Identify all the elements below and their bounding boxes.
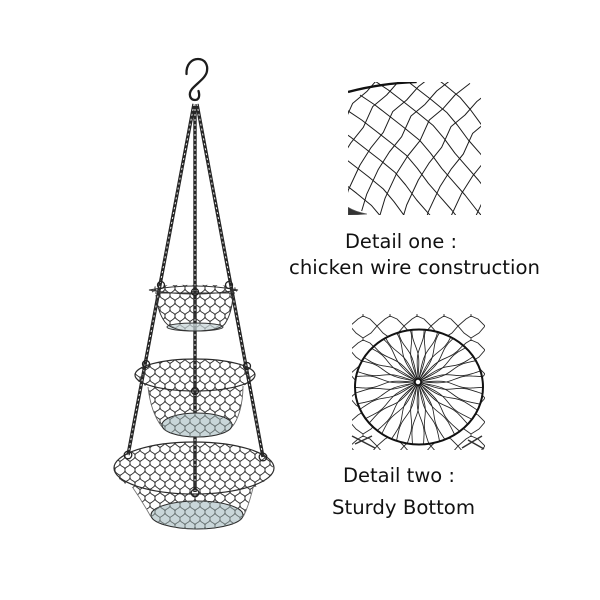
center hub — [415, 379, 421, 385]
bottom disc background — [355, 330, 483, 444]
small basket outline — [149, 286, 238, 331]
small basket base — [167, 323, 223, 331]
outer net — [352, 314, 485, 450]
chain rings — [124, 282, 267, 497]
hanging basket product illustration — [114, 59, 274, 529]
detail two caption — [332, 464, 475, 519]
bottom ring — [355, 330, 483, 444]
wire rim — [348, 82, 417, 92]
caption line 1: Detail one : — [345, 230, 457, 253]
detail one photo: chicken wire close-up — [348, 82, 481, 215]
large basket mesh — [114, 442, 273, 528]
detail two photo: sturdy bottom close-up — [352, 314, 485, 450]
middle basket base — [162, 413, 232, 437]
large basket outline — [114, 442, 274, 494]
small basket mesh — [150, 285, 238, 331]
large basket base — [151, 501, 243, 529]
chains — [128, 104, 263, 492]
icon: S hook — [186, 59, 207, 100]
caption line 2: chicken wire construction — [289, 256, 540, 279]
bottom corner debris — [352, 436, 484, 449]
caption line 2: Sturdy Bottom — [332, 496, 475, 519]
middle basket outline — [135, 359, 255, 391]
middle basket — [135, 359, 255, 437]
detail one caption — [289, 230, 540, 279]
caption line 1: Detail two : — [343, 464, 455, 487]
infographic canvas — [113, 58, 538, 530]
rim shadow at corner — [348, 207, 367, 215]
spiral petal net — [356, 330, 482, 444]
small top basket — [149, 285, 238, 331]
middle basket mesh — [135, 359, 255, 437]
large basket — [114, 442, 274, 529]
